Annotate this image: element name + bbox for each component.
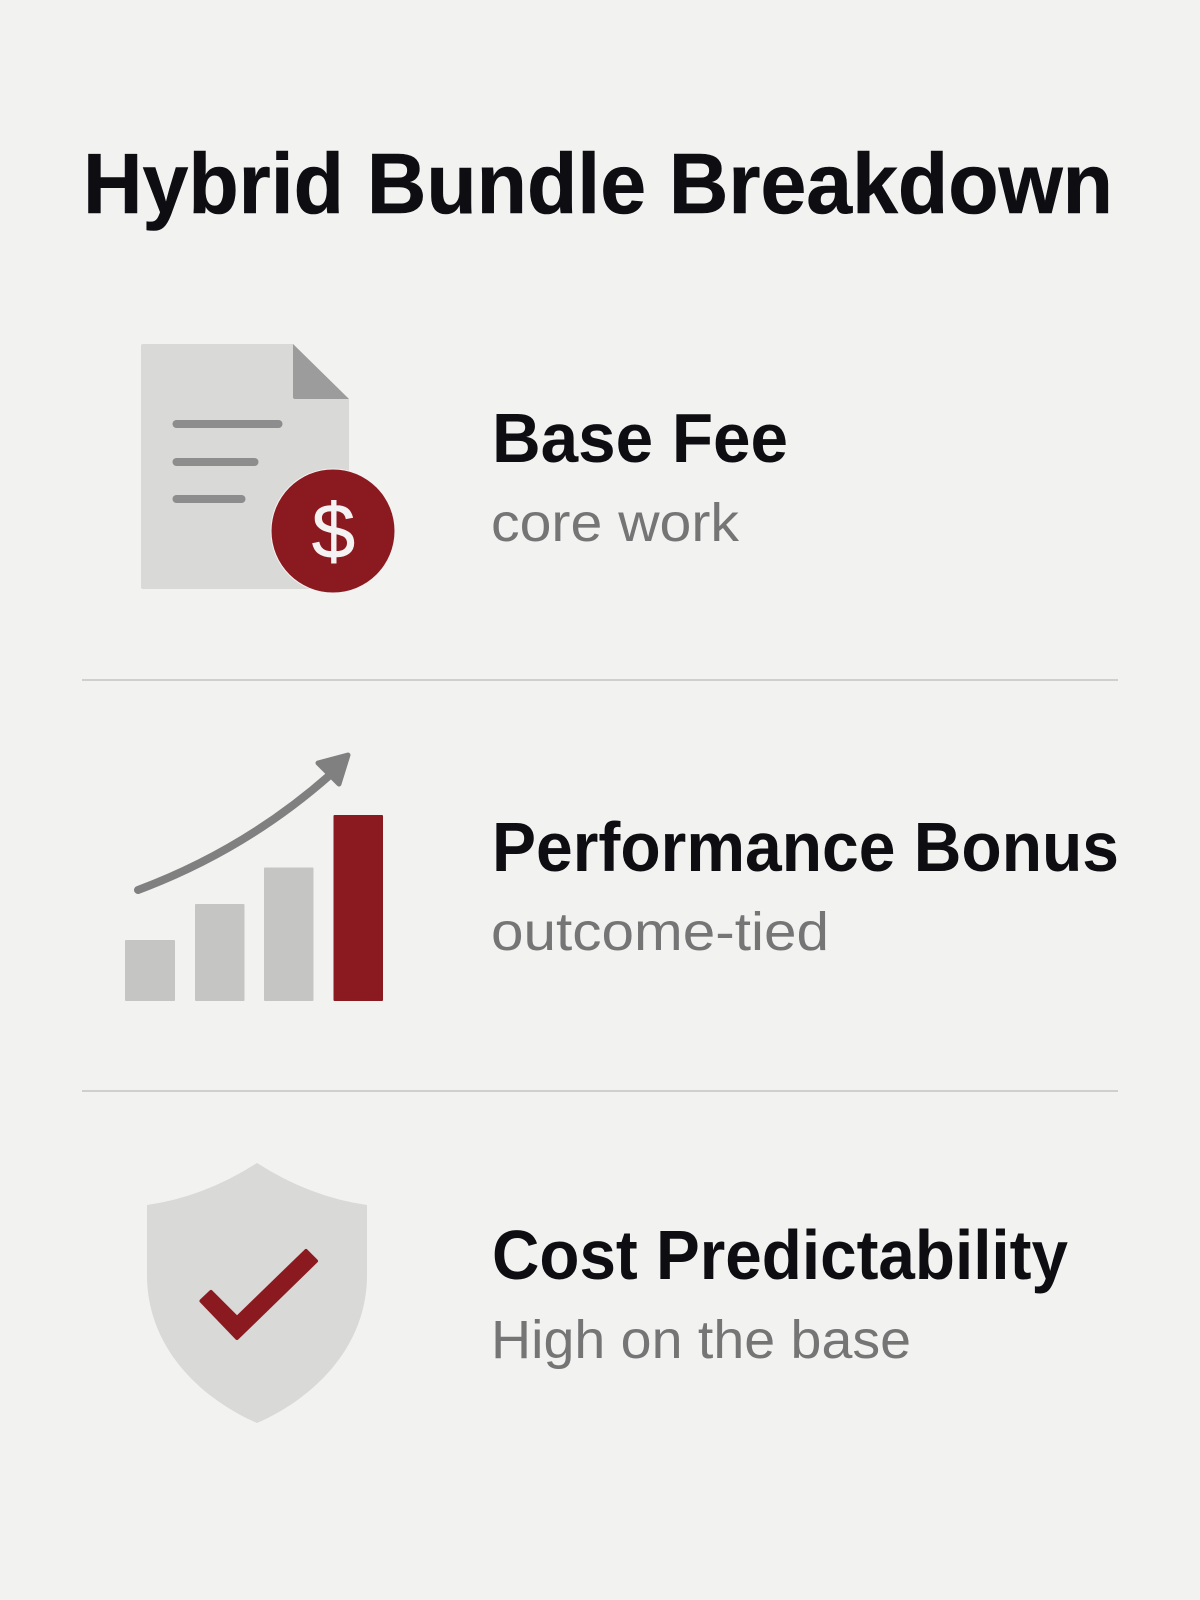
heading: base fee: Base Fee <box>492 399 788 477</box>
divider <box>82 1090 1118 1092</box>
heading: performance bonus: Performance Bonus <box>492 808 1119 886</box>
icon: document with dollar badge <box>141 344 396 594</box>
title: Hybrid Bundle Breakdown <box>83 137 1113 232</box>
panel: cost predictability <box>147 1163 1068 1423</box>
divider <box>82 679 1118 681</box>
subtext: outcome-tied: outcome-tied <box>491 902 829 962</box>
icon: document with dollar badge: $ <box>312 487 355 575</box>
icon: rising bar chart with arrow <box>125 755 383 1001</box>
icon: shield with check mark <box>147 1163 367 1423</box>
heading: cost predictability: Cost Predictability <box>492 1216 1068 1294</box>
panel: base fee <box>141 344 788 594</box>
subtext: core work: core work <box>491 493 740 553</box>
panel: performance bonus <box>125 755 1119 1001</box>
subtext: high on the base: High on the base <box>491 1310 911 1370</box>
